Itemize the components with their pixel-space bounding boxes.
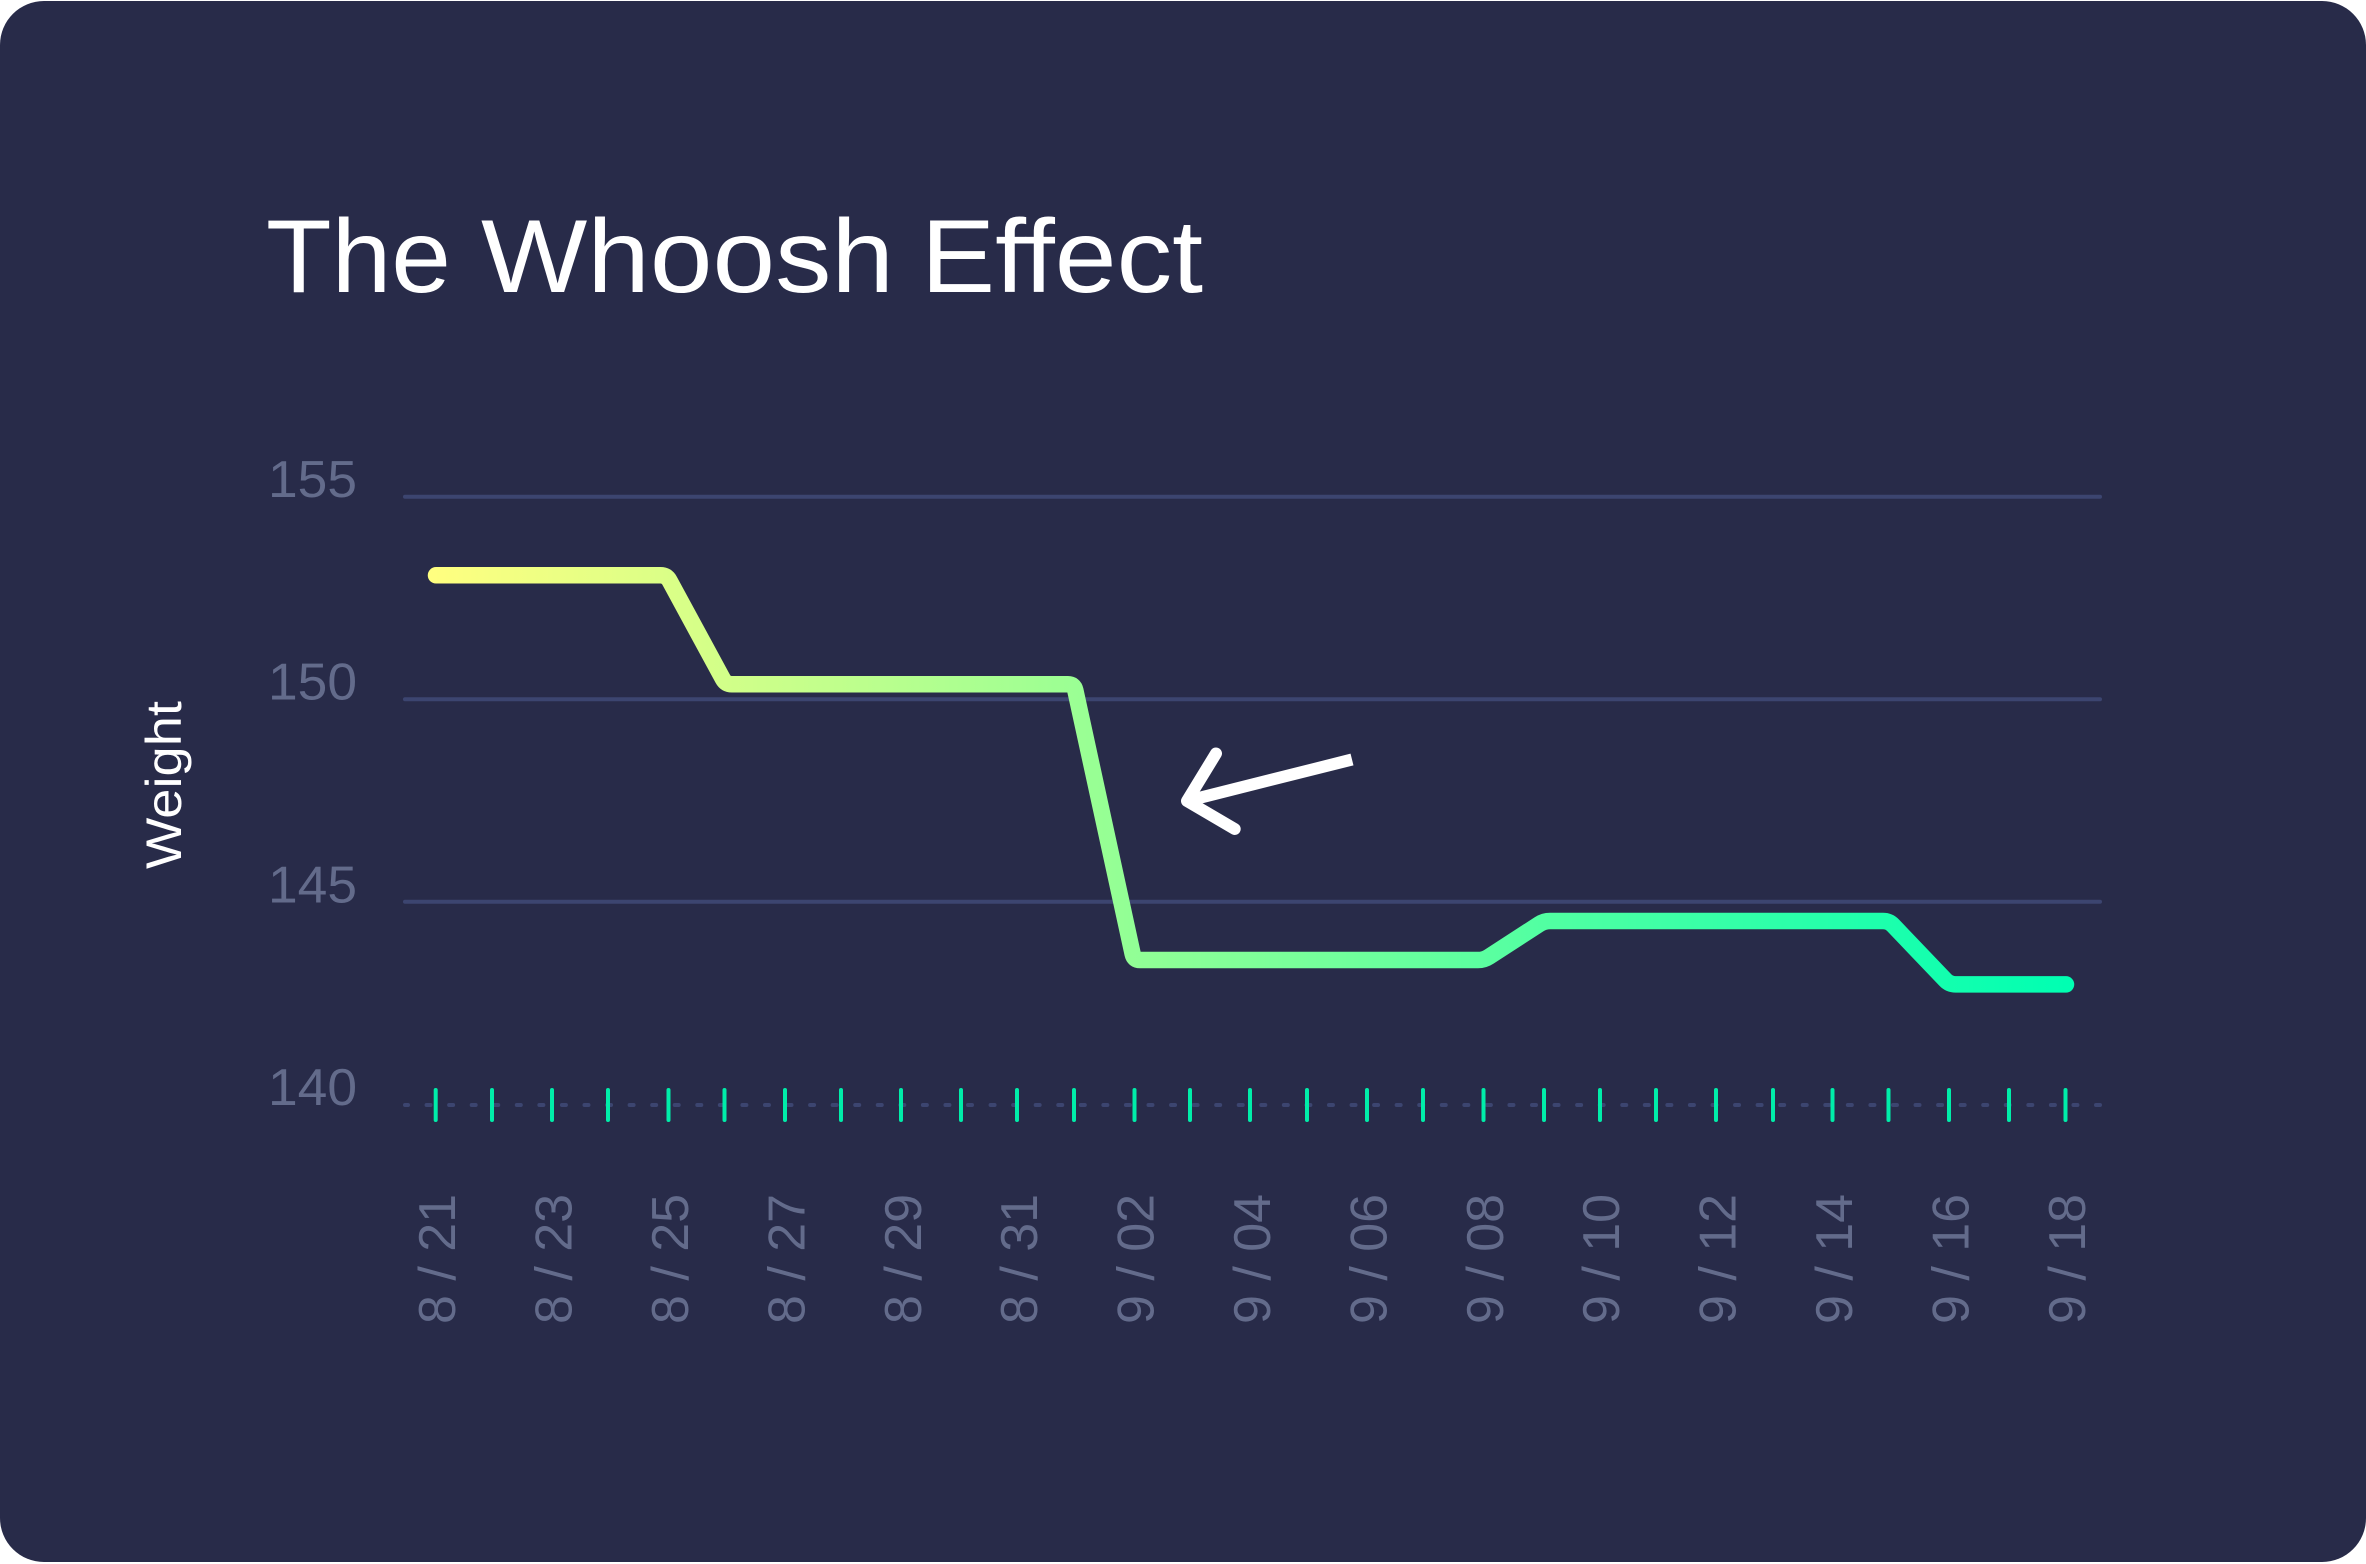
x axis date labels: 9 / 02 xyxy=(1108,1194,1166,1324)
x axis tick marks xyxy=(436,1090,2066,1120)
arrow annotation xyxy=(1187,754,1352,829)
y axis labels: 140 xyxy=(268,1059,357,1117)
y axis labels: 155 xyxy=(268,451,357,509)
weight trend line xyxy=(436,575,2066,984)
x axis date labels xyxy=(409,1194,2097,1324)
x axis date labels: 8 / 23 xyxy=(526,1194,584,1324)
x axis date labels: 9 / 10 xyxy=(1573,1194,1631,1324)
chart: weight over time xyxy=(268,451,2100,1324)
x axis date labels: 8 / 25 xyxy=(642,1194,700,1324)
title xyxy=(266,199,1203,315)
grid lines xyxy=(405,497,2100,902)
x axis date labels: 9 / 08 xyxy=(1457,1194,1515,1324)
x axis date labels: 9 / 16 xyxy=(1922,1194,1980,1324)
x axis date labels: 9 / 06 xyxy=(1340,1194,1398,1324)
x axis date labels: 9 / 12 xyxy=(1690,1194,1748,1324)
title: Whoosh xyxy=(481,199,894,315)
title: Effect xyxy=(921,199,1203,315)
y axis labels xyxy=(268,451,357,1117)
y axis title: Weight xyxy=(136,701,192,869)
x axis date labels: 8 / 27 xyxy=(758,1194,816,1324)
x axis date labels: 8 / 31 xyxy=(991,1194,1049,1324)
baseline dotted axis xyxy=(405,1103,2100,1107)
title: The xyxy=(266,199,451,315)
x axis date labels: 9 / 04 xyxy=(1224,1194,1282,1324)
x axis date labels: 8 / 29 xyxy=(875,1194,933,1324)
y axis labels: 150 xyxy=(268,654,357,712)
x axis date labels: 9 / 18 xyxy=(2039,1194,2097,1324)
x axis date labels: 8 / 21 xyxy=(409,1194,467,1324)
y axis labels: 145 xyxy=(268,856,357,914)
x axis date labels: 9 / 14 xyxy=(1806,1194,1864,1324)
